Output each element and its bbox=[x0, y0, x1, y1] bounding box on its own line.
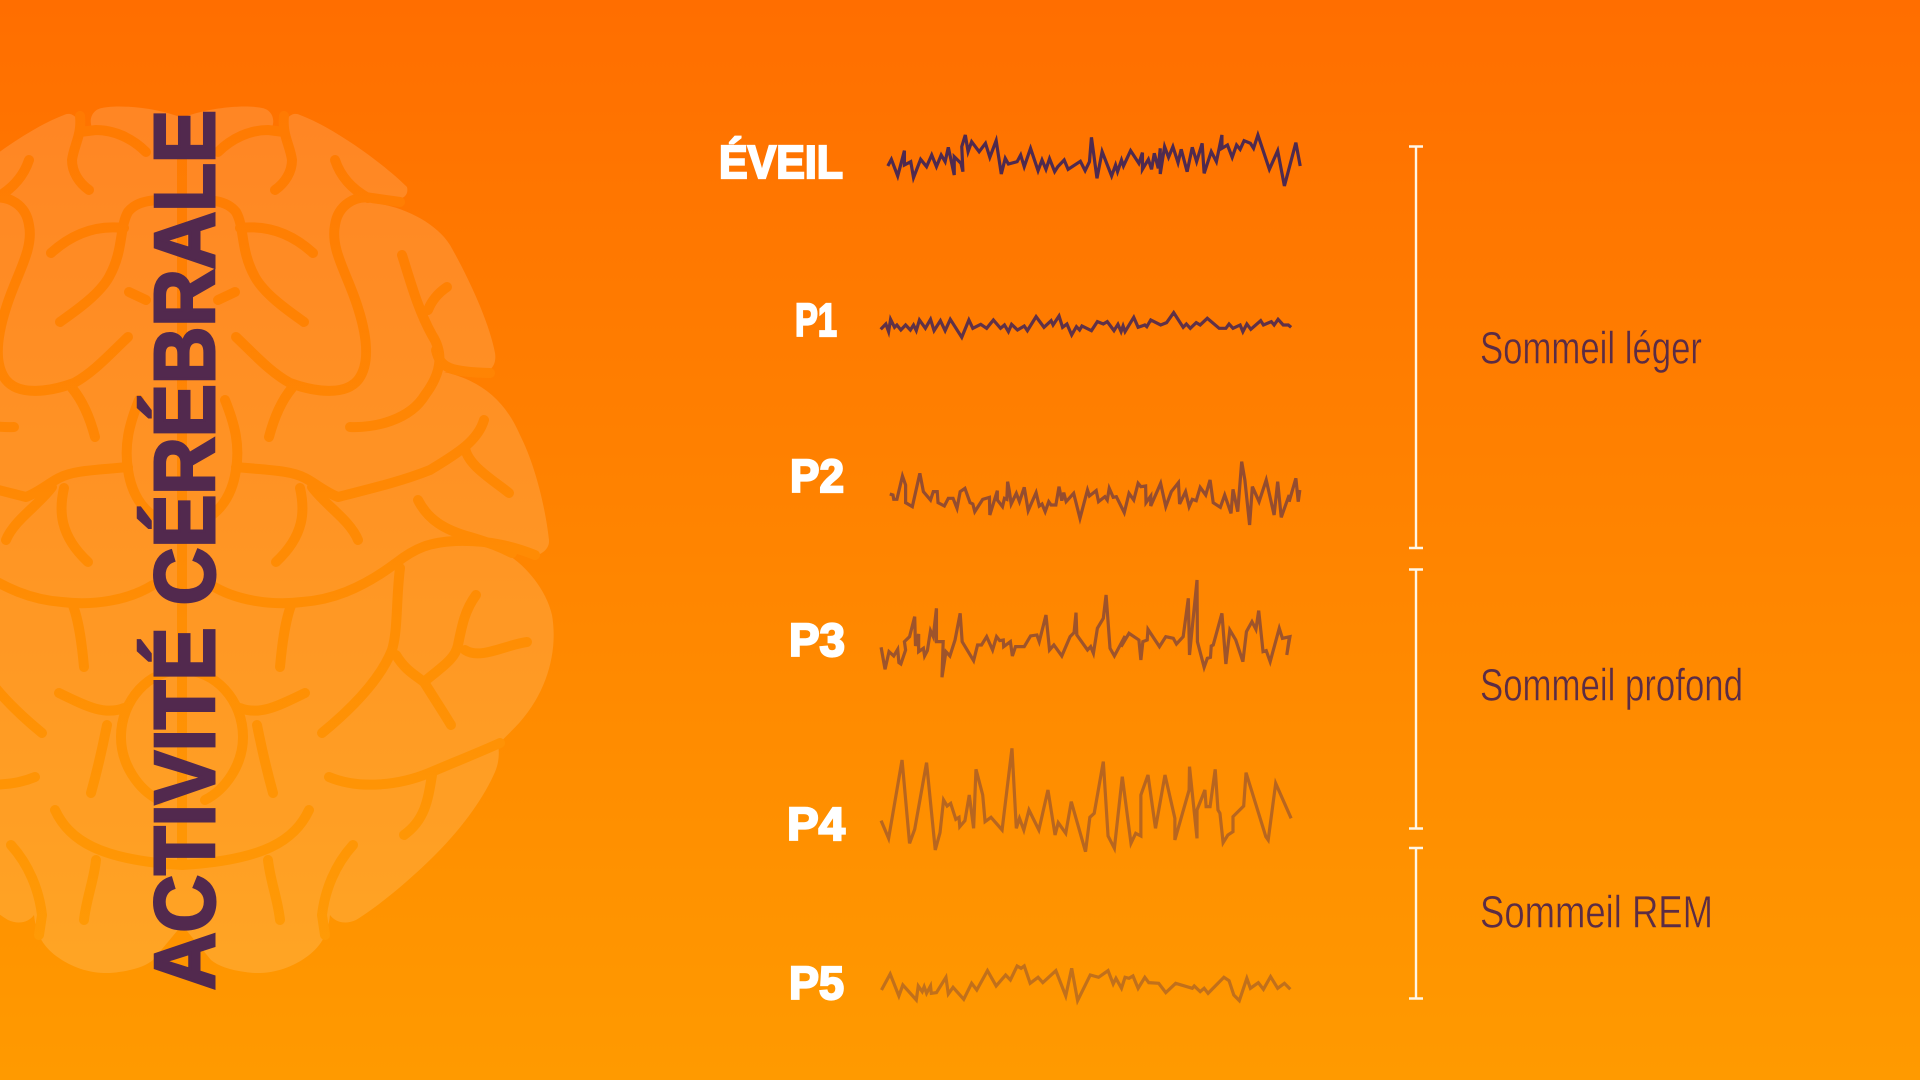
wave: ÉVEIL bbox=[888, 135, 1300, 186]
row: P2 bbox=[790, 450, 1300, 525]
bracket: sommeil profond bbox=[1409, 570, 1423, 828]
wave: P1 bbox=[881, 313, 1291, 337]
bracket: sommeil REM bbox=[1409, 848, 1423, 998]
label: sommeil REM: Sommeil REM bbox=[1480, 886, 1713, 938]
label: P1: P1 bbox=[795, 294, 837, 346]
wave: P3 bbox=[881, 580, 1290, 677]
label: P3: P3 bbox=[789, 614, 845, 666]
row: P4 bbox=[787, 748, 1291, 852]
label: sommeil léger: Sommeil léger bbox=[1480, 322, 1702, 374]
label: ÉVEIL: ÉVEIL bbox=[719, 136, 843, 188]
wave: P4 bbox=[881, 748, 1291, 852]
icon: brain bbox=[0, 106, 554, 973]
label: sommeil profond: Sommeil profond bbox=[1480, 660, 1743, 710]
label: P4: P4 bbox=[787, 798, 845, 850]
label: P5: P5 bbox=[789, 957, 844, 1009]
bracket: sommeil léger bbox=[1409, 146, 1423, 548]
row: P1 bbox=[795, 294, 1291, 346]
label: P2: P2 bbox=[790, 450, 844, 502]
wave: P2 bbox=[890, 462, 1300, 525]
row: P5 bbox=[789, 957, 1290, 1009]
wave: P5 bbox=[881, 966, 1290, 1001]
row: ÉVEIL bbox=[719, 135, 1300, 188]
row: P3 bbox=[789, 580, 1290, 677]
title: ACTIVITÉ CÉRÉBRALE bbox=[138, 110, 233, 990]
